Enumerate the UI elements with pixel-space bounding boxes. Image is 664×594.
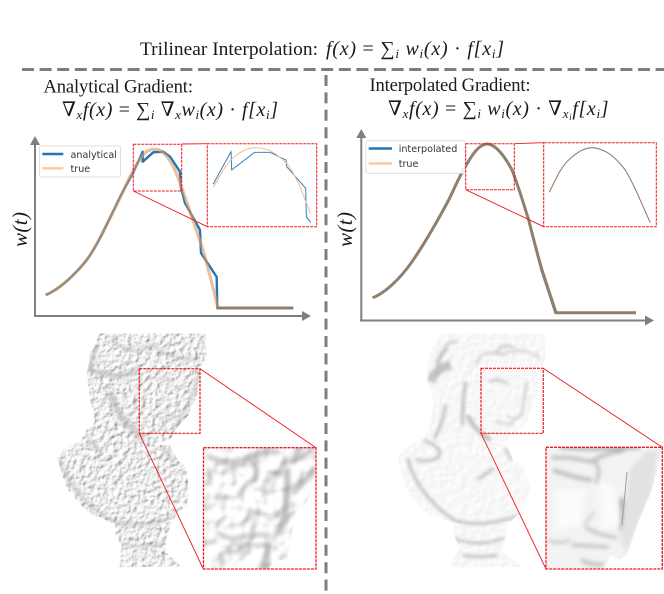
- formula: interpolated gradient: i: [477, 106, 481, 121]
- panel: analytical gradient: [8, 76, 317, 569]
- formula: analytical gradient: i: [151, 107, 155, 122]
- legend: analytical: [70, 150, 117, 161]
- legend: true: [70, 164, 90, 175]
- title: i: [492, 46, 496, 61]
- white background right of jaw: [604, 447, 662, 569]
- zoom box on curve: [133, 144, 182, 191]
- flat tail of curve: [217, 306, 293, 310]
- formula: interpolated gradient: i: [501, 106, 505, 121]
- y axis arrow: [360, 136, 362, 320]
- true curve: [46, 149, 218, 308]
- title: [140, 38, 504, 61]
- formula: interpolated gradient: w: [482, 98, 501, 120]
- formula: interpolated gradient: i: [569, 112, 572, 122]
- zoom connector lines: [139, 369, 316, 569]
- x axis arrow: [34, 315, 304, 317]
- formula: analytical gradient: ∇: [155, 99, 175, 121]
- inset frame: interpolated bust: [546, 447, 662, 569]
- inset: interpolated bust face: [546, 447, 662, 569]
- formula: interpolated gradient: x: [402, 106, 409, 121]
- legend: [40, 146, 120, 177]
- zoom box on interpolated bust: [481, 368, 543, 433]
- title: Trilinear Interpolation:: [140, 39, 318, 60]
- title: w: [400, 38, 419, 60]
- interpolated curve: [373, 144, 636, 313]
- formula: interpolated gradient: (x) · ∇: [505, 98, 562, 120]
- bust shading: [59, 338, 200, 546]
- formula: interpolated gradient: ∇: [388, 98, 402, 120]
- formula: analytical gradient: i: [195, 107, 199, 122]
- formula: interpolated gradient: i: [596, 106, 600, 121]
- y axis arrow: [34, 143, 36, 316]
- zoom box on analytical bust: [139, 369, 200, 433]
- formula: analytical gradient: f(x) = ∑: [83, 99, 150, 121]
- inset chart: [207, 144, 317, 227]
- title: i: [420, 46, 424, 61]
- inset: analytical bust face: [204, 448, 316, 569]
- formula: analytical gradient: i: [266, 107, 270, 122]
- y axis label: w(t): [333, 212, 357, 247]
- bust: interpolated, smooth surface: [397, 333, 546, 567]
- title: (x) · f[x: [424, 38, 491, 60]
- heading: analytical gradient: Analytical Gradient:: [44, 76, 193, 98]
- zoom connector lines: [466, 143, 544, 227]
- title: f(x) = ∑: [326, 38, 395, 60]
- analytical curve: [46, 152, 293, 308]
- white background right of jaw: [268, 468, 316, 569]
- true curve: [373, 144, 636, 313]
- bust shading: [407, 342, 541, 557]
- legend: [366, 141, 465, 173]
- formula: analytical gradient: ∇: [62, 99, 76, 121]
- inset frame: analytical bust: [204, 448, 316, 569]
- formula: analytical gradient: x: [174, 107, 181, 122]
- chart: interpolated vs true: [360, 136, 656, 320]
- zoom connector lines: [133, 144, 207, 227]
- formula: analytical gradient: x: [76, 107, 83, 122]
- y axis label: w(t): [8, 212, 32, 247]
- crack between face and hair: [622, 472, 627, 525]
- vertical dashed divider: [324, 75, 328, 594]
- highlight on nose and cheek: [555, 480, 618, 530]
- legend: true: [399, 159, 418, 170]
- chart: analytical vs true: [34, 143, 317, 316]
- formula: interpolated gradient: f[x: [572, 98, 596, 120]
- title: i: [395, 46, 399, 61]
- panel: interpolated gradient: [333, 75, 662, 569]
- horizontal dashed divider: [22, 68, 664, 71]
- formula: analytical gradient: (x) · f[x: [200, 99, 265, 121]
- bust: analytical, rough surface: [57, 333, 207, 567]
- formula: interpolated gradient: ]: [600, 98, 608, 120]
- inset chart: [544, 143, 656, 227]
- formula: interpolated gradient: f(x) = ∑: [409, 98, 477, 120]
- zoom connector lines: [481, 368, 662, 569]
- legend: interpolated: [399, 144, 457, 155]
- title: ]: [495, 38, 504, 60]
- x axis arrow: [360, 320, 647, 322]
- zoom box on curve: [466, 144, 514, 190]
- heading: interpolated gradient: Interpolated Gradient:: [370, 75, 530, 96]
- formula: interpolated gradient: x: [562, 106, 569, 121]
- formula: analytical gradient: w: [182, 99, 196, 121]
- formula: analytical gradient: ]: [269, 99, 278, 121]
- hair beside the face: [620, 450, 658, 552]
